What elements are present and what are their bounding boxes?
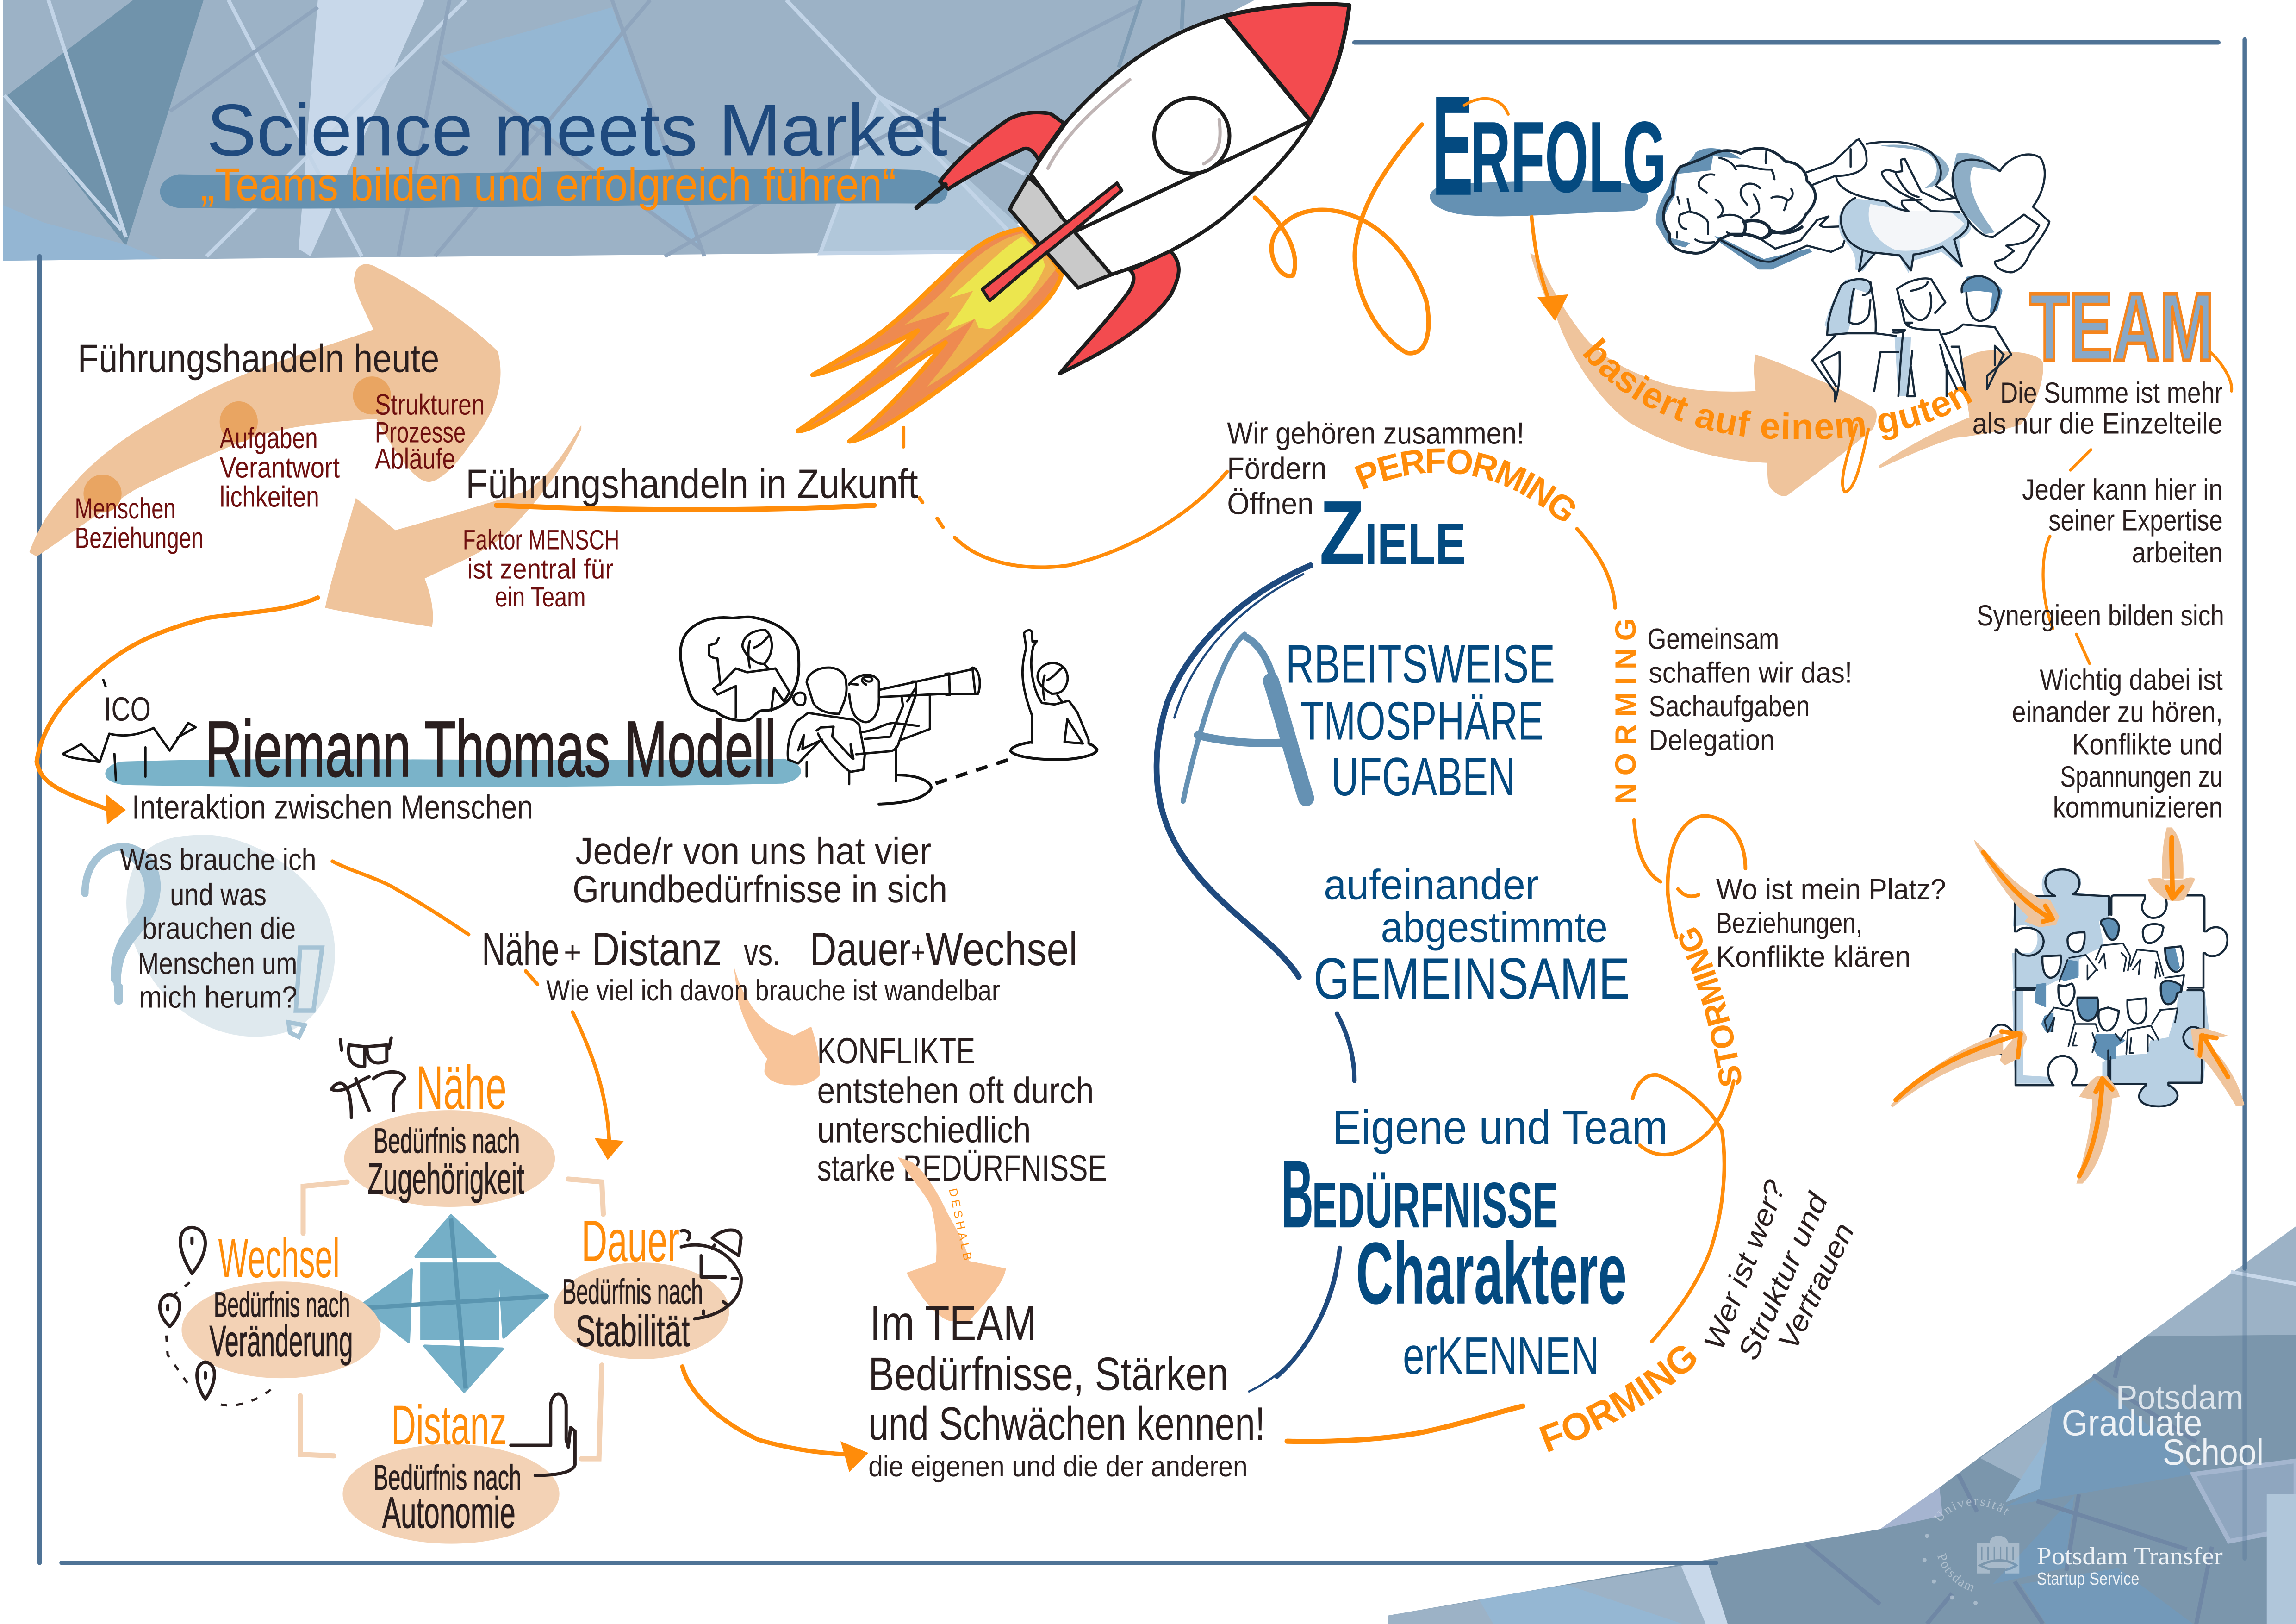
text: Konflikte: unterschiedlich bbox=[817, 1110, 1031, 1151]
text: Wo ist mein Platz bbox=[1716, 874, 1946, 974]
heading: Erfolg bbox=[1430, 66, 1666, 225]
text: Konflikte bbox=[817, 1031, 1107, 1189]
text: Wie viel: Wie viel ich davon brauche ist wandelbar bbox=[546, 975, 1001, 1008]
text: Im Team bbox=[868, 1296, 1265, 1484]
text: Wo ist mein Platz: Konflikte klären bbox=[1716, 942, 1911, 974]
text: Bedürfnisse Charaktere erkennen: Charaktere bbox=[1356, 1224, 1627, 1323]
puzzle blue pieces bbox=[2012, 868, 2209, 1107]
rotated text: Wer ist wer bbox=[1699, 1175, 1861, 1365]
icon: university seal: Potsdam bbox=[1935, 1551, 1977, 1595]
connector bbox=[1577, 529, 1615, 608]
connector: team to forming bbox=[1287, 1406, 1523, 1442]
text: Strukturen bbox=[375, 390, 485, 476]
text: Wichtig dabei: kommunizieren bbox=[2053, 793, 2223, 824]
text: Strukturen: Abläufe bbox=[375, 444, 455, 476]
text: aufeinander abgestimmte gemeinsame bbox=[1313, 862, 1630, 1012]
logo: Potsdam Transfer: Potsdam Transfer bbox=[2037, 1542, 2223, 1570]
rocket right fin bbox=[1060, 251, 1179, 374]
text: Die Summe ist mehr: Die Summe ist mehr bbox=[2000, 378, 2223, 410]
rocket red stick bbox=[982, 183, 1122, 300]
text: Aufgaben: Verantwort bbox=[220, 453, 340, 485]
arrow: basiert auf einem guten bbox=[1530, 217, 2043, 496]
Erfolg underlay bbox=[1430, 180, 1648, 216]
need: Wechsel bbox=[160, 1227, 381, 1405]
text: Konflikte: starke BEDÜRFNISSE bbox=[817, 1148, 1107, 1189]
text: Synergieen: Synergieen bilden sich bbox=[1977, 600, 2224, 633]
text: Jede/r von uns: Grundbedürfnisse in sich bbox=[572, 867, 947, 911]
need: Dauer: Dauer bbox=[581, 1210, 679, 1274]
text: Bedürfnisse Charaktere erkennen: B bbox=[1281, 1139, 1313, 1248]
text: Aufgaben bbox=[220, 423, 340, 514]
heading: Erfolg: RFOLG bbox=[1470, 101, 1666, 214]
need: Nähe: Bedürfnis nach bbox=[373, 1122, 520, 1162]
text: Wo ist mein Platz: Beziehungen, bbox=[1716, 908, 1862, 940]
connector bbox=[2071, 450, 2091, 470]
text: Was brauche ich: und was bbox=[170, 879, 267, 912]
logo: Potsdam Transfer: Startup Service bbox=[2037, 1568, 2140, 1589]
text: Bedürfnisse Charaktere erkennen: EDÜRFNISSE bbox=[1312, 1170, 1558, 1242]
label: Norming: NORMING bbox=[1611, 618, 1643, 804]
text: Wir gehören zusammen bbox=[1227, 418, 1524, 521]
need: Distanz: Bedürfnis nach bbox=[373, 1459, 521, 1499]
icon: route pins bbox=[160, 1227, 274, 1405]
text: Im Team: Im TEAM bbox=[870, 1296, 1037, 1352]
text: Jeder kann hier in: Jeder kann hier in bbox=[2022, 475, 2223, 507]
text: Die Summe ist mehr bbox=[1972, 378, 2223, 441]
text: Aufgaben: lichkeiten bbox=[220, 482, 319, 514]
need: Nähe: Nähe bbox=[416, 1053, 507, 1122]
need: Nähe: Zugehörigkeit bbox=[367, 1156, 525, 1204]
connector: Zukunft to Performing bbox=[903, 428, 1227, 567]
need: Wechsel: Bedürfnis nach bbox=[214, 1286, 350, 1325]
text: Faktor Mensch: ein Team bbox=[495, 583, 586, 614]
heading: Führungshandeln heute: Führungshandeln heute bbox=[78, 337, 439, 381]
text: aufeinander abgestimmte gemeinsame: abgestimmte bbox=[1381, 905, 1608, 952]
text: aufeinander abgestimmte gemeinsame: aufeinander bbox=[1324, 862, 1539, 910]
text: Nähe + Distanz vs. Dauer + Wechsel: Distanz bbox=[591, 923, 722, 975]
arrow: deshalb bbox=[897, 1157, 1006, 1321]
rocket flames bbox=[798, 229, 1062, 441]
need: Wechsel: Veränderung bbox=[210, 1318, 353, 1367]
heading: Ziele: Z bbox=[1319, 483, 1365, 584]
heading: Ziele bbox=[1319, 483, 1466, 584]
label: Forming: FORMING bbox=[1534, 1334, 1707, 1462]
subtitle bar bbox=[160, 169, 947, 209]
rotated text: Wer ist wer: Vertrauen bbox=[1773, 1218, 1861, 1355]
text: Faktor Mensch bbox=[463, 526, 619, 614]
need: Nähe bbox=[331, 1038, 555, 1207]
text: Bedürfnisse Charaktere erkennen bbox=[1281, 1139, 1627, 1386]
thought bubble bbox=[680, 617, 799, 720]
title: Science meets Market bbox=[206, 89, 947, 171]
text: Nähe + Distanz vs. Dauer + Wechsel bbox=[482, 923, 1078, 975]
illustration: brain, bubble and heart bbox=[1656, 139, 2049, 401]
heading: Team: TEAM bbox=[2029, 272, 2214, 381]
logo: Potsdam Graduate School: Graduate bbox=[2062, 1403, 2202, 1444]
heading: Ziele: IELE bbox=[1365, 512, 1466, 577]
text: Menschen: Beziehungen bbox=[75, 523, 204, 555]
text: Jeder kann hier in: arbeiten bbox=[2132, 537, 2223, 570]
connector brackets bbox=[300, 1179, 604, 1459]
big letter A bbox=[1183, 634, 1306, 801]
rotated text: Wer ist wer: Wer ist wer? bbox=[1699, 1175, 1793, 1355]
text: Wichtig dabei: Spannungen zu bbox=[2060, 762, 2223, 794]
text: Menschen bbox=[75, 493, 204, 555]
text: Im Team: die eigenen und die der anderen bbox=[868, 1451, 1248, 1484]
telescope person bbox=[788, 668, 980, 804]
text: Nähe + Distanz vs. Dauer + Wechsel: + bbox=[911, 937, 926, 969]
text: Nähe + Distanz vs. Dauer + Wechsel: Nähe bbox=[482, 923, 560, 975]
rotated text: Wer ist wer: Struktur und bbox=[1733, 1187, 1836, 1365]
logo: Potsdam Graduate School: Potsdam bbox=[2116, 1378, 2243, 1416]
raised-arm person bbox=[1011, 630, 1097, 760]
need: Dauer bbox=[554, 1210, 741, 1359]
connector loop bbox=[1634, 816, 1745, 937]
connector: Stabilität to Team bbox=[682, 1367, 868, 1472]
connector bbox=[2076, 634, 2090, 663]
illustration: telescope figures bbox=[680, 617, 1097, 804]
icon: shrugging figure: ICO bbox=[104, 690, 151, 728]
logo: Potsdam Transfer bbox=[1924, 1494, 2223, 1603]
heading: Riemann Thomas Modell: Riemann Thomas Modell bbox=[205, 706, 776, 794]
arrow: basiert auf einem guten: basiert auf einem guten bbox=[1574, 332, 1979, 448]
icon: alarm clock bbox=[681, 1230, 741, 1319]
text: Jede/r von uns: Jede/r von uns hat vier bbox=[575, 829, 932, 873]
header background bbox=[3, 0, 1255, 261]
puzzle team figures bbox=[2035, 918, 2184, 1082]
text: Aufgaben: Aufgaben bbox=[220, 423, 318, 456]
curved bracket bbox=[1157, 565, 1355, 1392]
text: Eigene und Team: Eigene und Team bbox=[1332, 1100, 1668, 1154]
rocket window bbox=[1154, 98, 1230, 174]
text: Strukturen: Strukturen bbox=[375, 390, 485, 422]
text: Arbeitsweise Atmosphäre Aufgaben: TMOSPHÄRE bbox=[1300, 691, 1543, 751]
heading: Erfolg: E bbox=[1432, 66, 1473, 225]
text: Jede/r von uns bbox=[572, 829, 947, 911]
icon: question mark bbox=[85, 847, 322, 1037]
text: Menschen: Menschen bbox=[75, 493, 176, 526]
logo: Potsdam Graduate School: School bbox=[2163, 1432, 2264, 1474]
arrow: Führungshandeln in Zukunft bbox=[325, 425, 581, 627]
text: Faktor Mensch: ist zentral für bbox=[467, 555, 615, 586]
highlight dots bbox=[83, 376, 482, 552]
arrow: Konflikte bbox=[734, 965, 820, 1085]
text: aufeinander abgestimmte gemeinsame: GEMEINSAME bbox=[1313, 948, 1630, 1012]
orange flight loop bbox=[1255, 125, 1429, 353]
puzzle with team bbox=[1891, 827, 2245, 1184]
team figures bbox=[1812, 276, 2011, 401]
icon: shrugging figure bbox=[63, 680, 196, 781]
text: Bedürfnisse Charaktere erkennen: erKENNEN bbox=[1403, 1325, 1599, 1386]
heart bbox=[1953, 153, 2049, 272]
connector bbox=[332, 861, 469, 934]
text: Wichtig dabei: einander zu hören, bbox=[2012, 697, 2223, 730]
heading: Riemann Thomas Modell bbox=[105, 706, 801, 794]
text: Konflikte: KONFLIKTE bbox=[817, 1031, 975, 1072]
text: Wo ist mein Platz: Wo ist mein Platz? bbox=[1716, 874, 1946, 906]
heading: Führungshandeln in Zukunft: Führungshandeln in Zukunft bbox=[466, 462, 918, 507]
puzzle arrows bbox=[1891, 827, 2245, 1184]
text: Nähe + Distanz vs. Dauer + Wechsel: Wechsel bbox=[926, 923, 1078, 975]
rocket left fin bbox=[940, 112, 1064, 189]
label: Performing: PERFORMING bbox=[1350, 442, 1585, 532]
text: Gemeinsam: schaffen wir das! bbox=[1649, 658, 1852, 690]
text: Arbeitsweise Atmosphäre Aufgaben: UFGABEN bbox=[1331, 747, 1516, 807]
text: Wir gehören zusammen: Fördern bbox=[1227, 453, 1326, 486]
connector bbox=[2043, 536, 2053, 628]
rocket nose bbox=[1224, 4, 1350, 121]
arrow: Führungshandeln heute bbox=[29, 264, 500, 556]
text: Im Team: und Schwächen kennen! bbox=[868, 1397, 1265, 1450]
diagram: four needs bbox=[160, 1038, 741, 1544]
text: Arbeitsweise Atmosphäre Aufgaben bbox=[1286, 634, 1555, 807]
subtitle: „Teams bilden und erfolgreich führen“ bbox=[201, 158, 896, 211]
text: Nähe + Distanz vs. Dauer + Wechsel: Dauer bbox=[810, 923, 911, 975]
text: Im Team: Bedürfnisse, Stärken bbox=[868, 1348, 1229, 1400]
text: Wichtig dabei: Konflikte und bbox=[2072, 730, 2223, 762]
connector: Wie viel to Dauer bbox=[526, 971, 624, 1160]
bottom-right background bbox=[1388, 1226, 2296, 1624]
text: Wichtig dabei bbox=[2012, 665, 2223, 824]
need: Distanz: Distanz bbox=[391, 1396, 507, 1457]
puzzle outlines bbox=[2015, 869, 2109, 987]
brain bbox=[1656, 148, 1849, 269]
need: Distanz bbox=[342, 1394, 575, 1544]
need: Distanz: Autonomie bbox=[382, 1490, 516, 1538]
rocket nozzle bbox=[1010, 177, 1111, 288]
title bbox=[160, 89, 947, 211]
text: Jeder kann hier in bbox=[2022, 475, 2223, 570]
dashed line bbox=[936, 758, 1014, 783]
text: Die Summe ist mehr: als nur die Einzelteile bbox=[1972, 409, 2223, 441]
text: Was brauche ich: mich herum? bbox=[139, 981, 297, 1015]
text: Jeder kann hier in: seiner Expertise bbox=[2048, 506, 2223, 537]
arrow: deshalb: DESHALB bbox=[946, 1187, 974, 1262]
text: Was brauche ich: Was brauche ich bbox=[120, 843, 316, 877]
icon: university seal: Universität bbox=[1931, 1494, 2013, 1525]
connector: to Interaktion bbox=[37, 598, 318, 824]
text: Nähe + Distanz vs. Dauer + Wechsel: vs. bbox=[744, 930, 780, 974]
text: Arbeitsweise Atmosphäre Aufgaben: RBEITSWEISE bbox=[1286, 634, 1555, 694]
icon: stop hand bbox=[511, 1394, 575, 1475]
text: Gemeinsam bbox=[1647, 624, 1852, 757]
logo: Potsdam Graduate School bbox=[2062, 1378, 2264, 1474]
label: Storming: STORMING bbox=[1669, 921, 1750, 1090]
text: Strukturen: Prozesse bbox=[375, 418, 466, 450]
text: Wir gehören zusammen: Öffnen bbox=[1227, 488, 1313, 521]
text: Konflikte: entstehen oft durch bbox=[817, 1071, 1094, 1112]
text: Wir gehören zusammen: Wir gehören zusammen! bbox=[1227, 418, 1524, 451]
text: Gemeinsam: Sachaufgaben bbox=[1649, 691, 1810, 724]
rocket bbox=[798, 4, 1350, 441]
text: Was brauche ich: Menschen um bbox=[137, 948, 297, 981]
icon: university seal bbox=[1924, 1494, 2019, 1603]
need: Dauer: Stabilität bbox=[575, 1308, 691, 1356]
text: Faktor Mensch: Faktor MENSCH bbox=[463, 526, 619, 556]
connector: storming to forming bbox=[1633, 1075, 1734, 1342]
central cross bbox=[362, 1216, 548, 1392]
text: Nähe + Distanz vs. Dauer + Wechsel: + bbox=[564, 937, 581, 969]
text: Gemeinsam: Gemeinsam bbox=[1647, 624, 1779, 656]
need: Wechsel: Wechsel bbox=[218, 1229, 340, 1290]
rocket body bbox=[1031, 16, 1311, 275]
icon: two people bbox=[331, 1038, 404, 1118]
text: Was brauche ich: brauchen die bbox=[142, 912, 296, 946]
speech bubble and hand bbox=[1807, 139, 1971, 273]
text: Was brauche ich bbox=[120, 843, 316, 1015]
text: Gemeinsam: Delegation bbox=[1649, 725, 1775, 757]
text: Wichtig dabei: Wichtig dabei ist bbox=[2040, 665, 2223, 697]
text: Interaktion: Interaktion zwischen Menschen bbox=[132, 788, 533, 826]
question blob bbox=[85, 835, 335, 1037]
need: Dauer: Bedürfnis nach bbox=[562, 1273, 703, 1312]
